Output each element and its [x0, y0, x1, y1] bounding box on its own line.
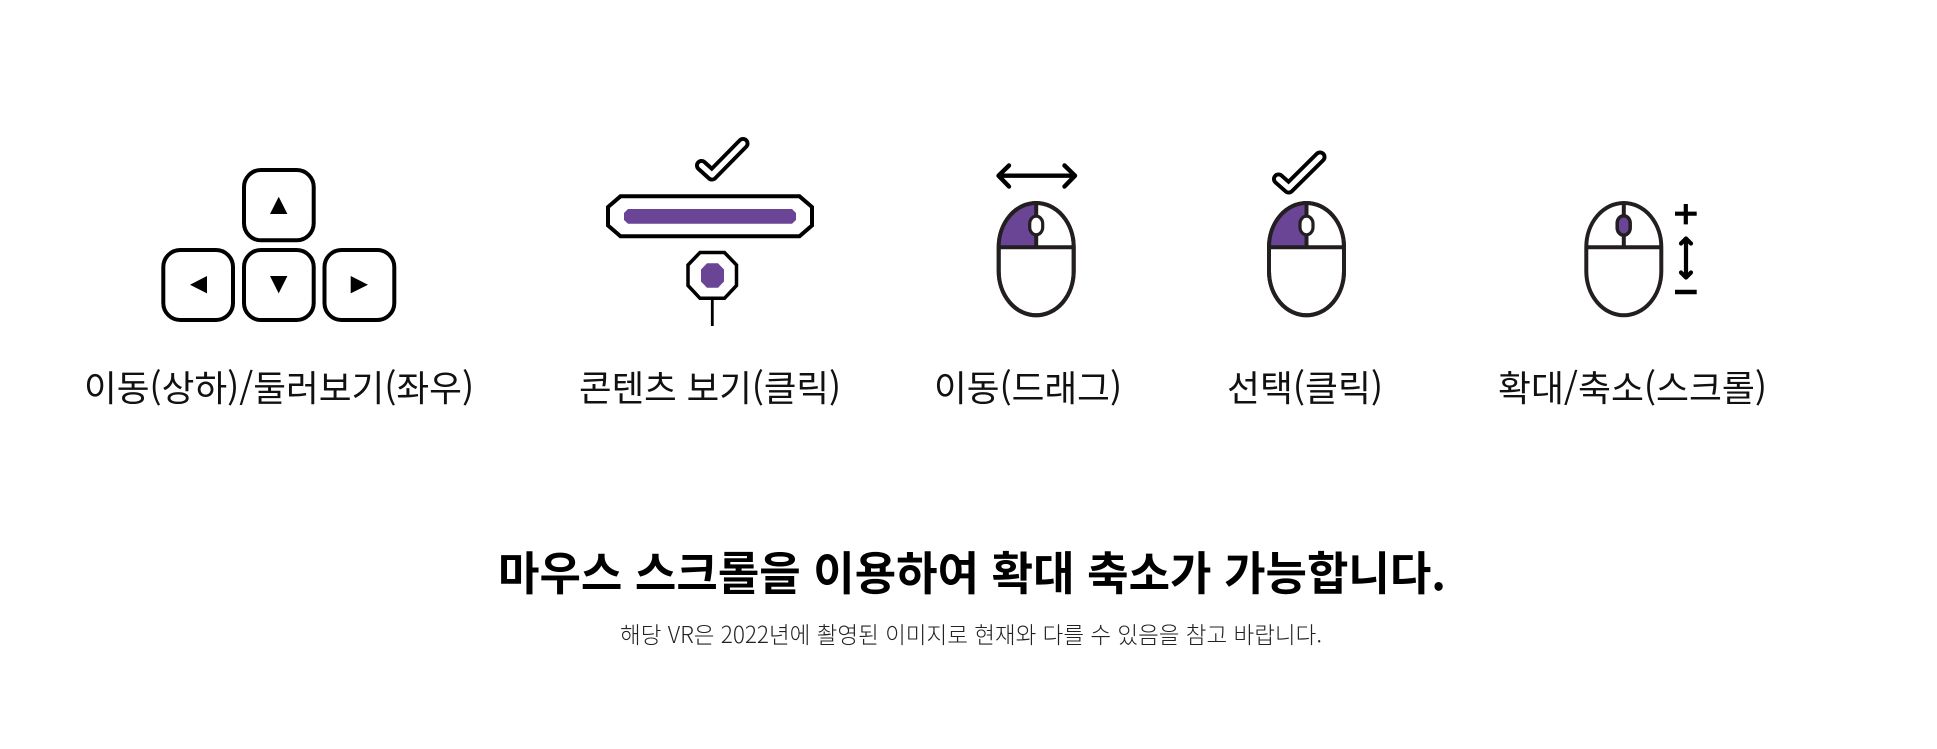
mouse: [1586, 203, 1661, 315]
key: right: [324, 250, 394, 320]
label: mouse drag: 이동(드래그): [934, 360, 1122, 412]
icon: arrow keys: [163, 170, 394, 320]
plus: [1675, 204, 1697, 224]
check mark: [702, 144, 743, 175]
minus: [1675, 290, 1697, 294]
vertical arrow: [1681, 238, 1691, 278]
key: left: [163, 250, 233, 320]
heading: 마우스 스크롤을 이용하여 확대 축소가 가능합니다.: [498, 538, 1446, 604]
label: arrow keys: 이동(상하)/둘러보기(좌우): [84, 360, 474, 412]
icon: content click: [608, 144, 812, 326]
key: down: [244, 250, 314, 320]
label: content click: 콘텐츠 보기(클릭): [579, 360, 841, 412]
icon: mouse click: [1269, 157, 1344, 315]
label: mouse scroll: 확대/축소(스크롤): [1498, 360, 1767, 412]
icon: mouse scroll: [1586, 203, 1697, 315]
check mark: [1278, 157, 1320, 188]
mouse: [1269, 203, 1344, 315]
icon: mouse drag: [998, 166, 1075, 315]
double arrow: [998, 166, 1075, 186]
key: up: [244, 170, 314, 240]
hotspot pin: [688, 252, 736, 326]
note text: 해당 VR은 2022년에 촬영된 이미지로 현재와 다를 수 있음을 참고 바랍니다.: [620, 616, 1322, 650]
mouse: [999, 203, 1074, 315]
bar: [608, 196, 812, 236]
label: mouse click: 선택(클릭): [1227, 360, 1383, 412]
